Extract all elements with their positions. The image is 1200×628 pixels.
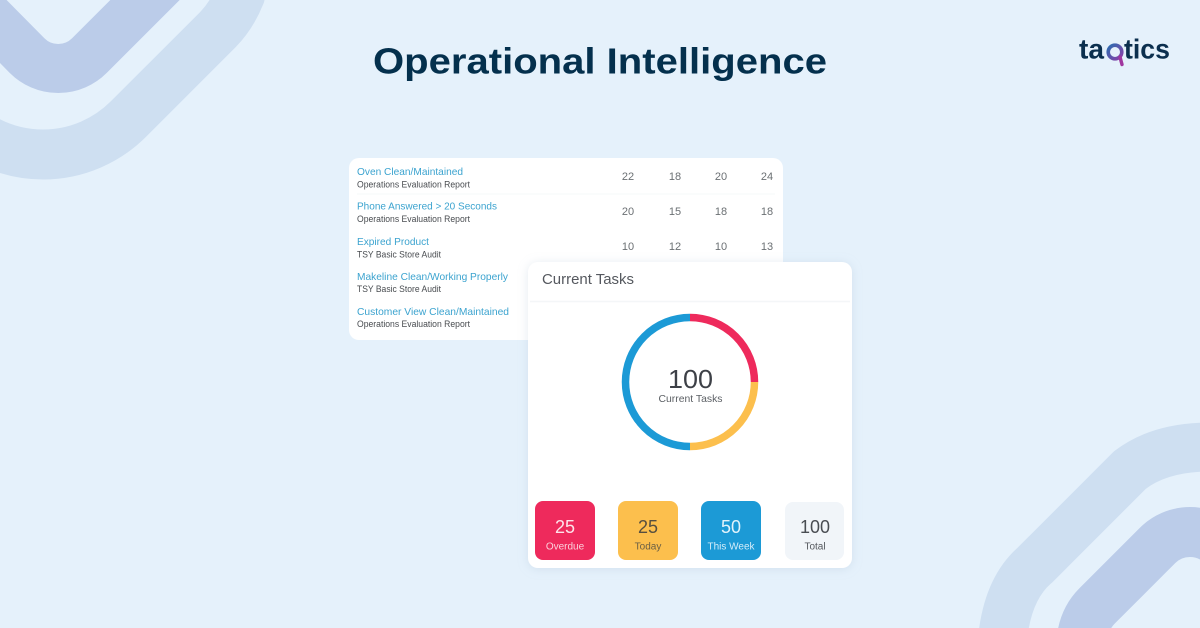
row: Phone Answered: 18 xyxy=(761,206,773,218)
row: Phone Answered: 18 xyxy=(715,206,727,218)
tile: This Week: This Week xyxy=(707,542,756,552)
row: Customer View xyxy=(357,306,509,329)
row: Expired Product: 13 xyxy=(761,241,773,253)
tile: This Week xyxy=(701,501,761,560)
logo: taqtics: ta xyxy=(1079,34,1104,64)
tile: Total: Total xyxy=(804,542,826,552)
row: Expired Product xyxy=(357,236,773,260)
row: Makeline Clean xyxy=(357,271,509,294)
row: Phone Answered: 20 xyxy=(622,206,634,218)
row: Oven Clean/Maintained xyxy=(357,166,773,190)
logo: taqtics: tics xyxy=(1124,34,1170,64)
row: Expired Product: 12 xyxy=(669,241,681,253)
tile: Today xyxy=(618,501,678,560)
tile: Total xyxy=(785,502,844,560)
donut centre label xyxy=(658,364,722,405)
row: Customer View: Customer View Clean/Maintained xyxy=(357,306,509,318)
tile: Today: 25 xyxy=(638,517,658,537)
row: Makeline Clean: Makeline Clean/Working Properly xyxy=(357,271,509,283)
tile: This Week: 50 xyxy=(721,517,741,537)
row: Phone Answered: Operations Evaluation Report xyxy=(357,214,470,224)
row: Makeline Clean: TSY Basic Store Audit xyxy=(357,284,441,294)
row: Expired Product: TSY Basic Store Audit xyxy=(357,250,441,260)
row: Oven Clean/Maintained: 20 xyxy=(715,171,727,183)
donut centre label: 100 xyxy=(668,364,713,394)
icon: magnifier letter q xyxy=(1108,45,1122,64)
row: Expired Product: 10 xyxy=(715,241,727,253)
panel: report table xyxy=(349,158,783,340)
row: Oven Clean/Maintained: 18 xyxy=(669,171,681,183)
panel: current tasks xyxy=(528,262,852,568)
logo: taqtics xyxy=(1079,34,1170,64)
row: Oven Clean/Maintained: Oven Clean/Maintained xyxy=(357,166,463,178)
tile: Overdue: 25 xyxy=(555,517,575,537)
row: Phone Answered xyxy=(357,200,773,224)
title: Operational Intelligence xyxy=(373,40,827,82)
row: Oven Clean/Maintained: 22 xyxy=(622,171,634,183)
row: Phone Answered: 15 xyxy=(669,206,681,218)
tile: Overdue xyxy=(535,501,595,560)
donut chart xyxy=(626,318,754,446)
tile: Overdue: Overdue xyxy=(546,542,585,552)
row: Oven Clean/Maintained: 24 xyxy=(761,171,773,183)
heading: Current Tasks: Current Tasks xyxy=(542,272,634,288)
tile: Total: 100 xyxy=(800,517,830,537)
decoration: top-left chevrons xyxy=(0,0,248,155)
row: Oven Clean/Maintained: Operations Evaluation Report xyxy=(357,180,470,190)
row: Expired Product: Expired Product xyxy=(357,236,429,248)
decoration: bottom-right chevrons xyxy=(1002,447,1200,628)
tile: Today: Today xyxy=(635,542,661,552)
row: Expired Product: 10 xyxy=(622,241,634,253)
donut centre label: Current Tasks xyxy=(658,393,722,405)
row: Phone Answered: Phone Answered > 20 Seconds xyxy=(357,200,497,212)
row: Customer View: Operations Evaluation Report xyxy=(357,319,470,329)
